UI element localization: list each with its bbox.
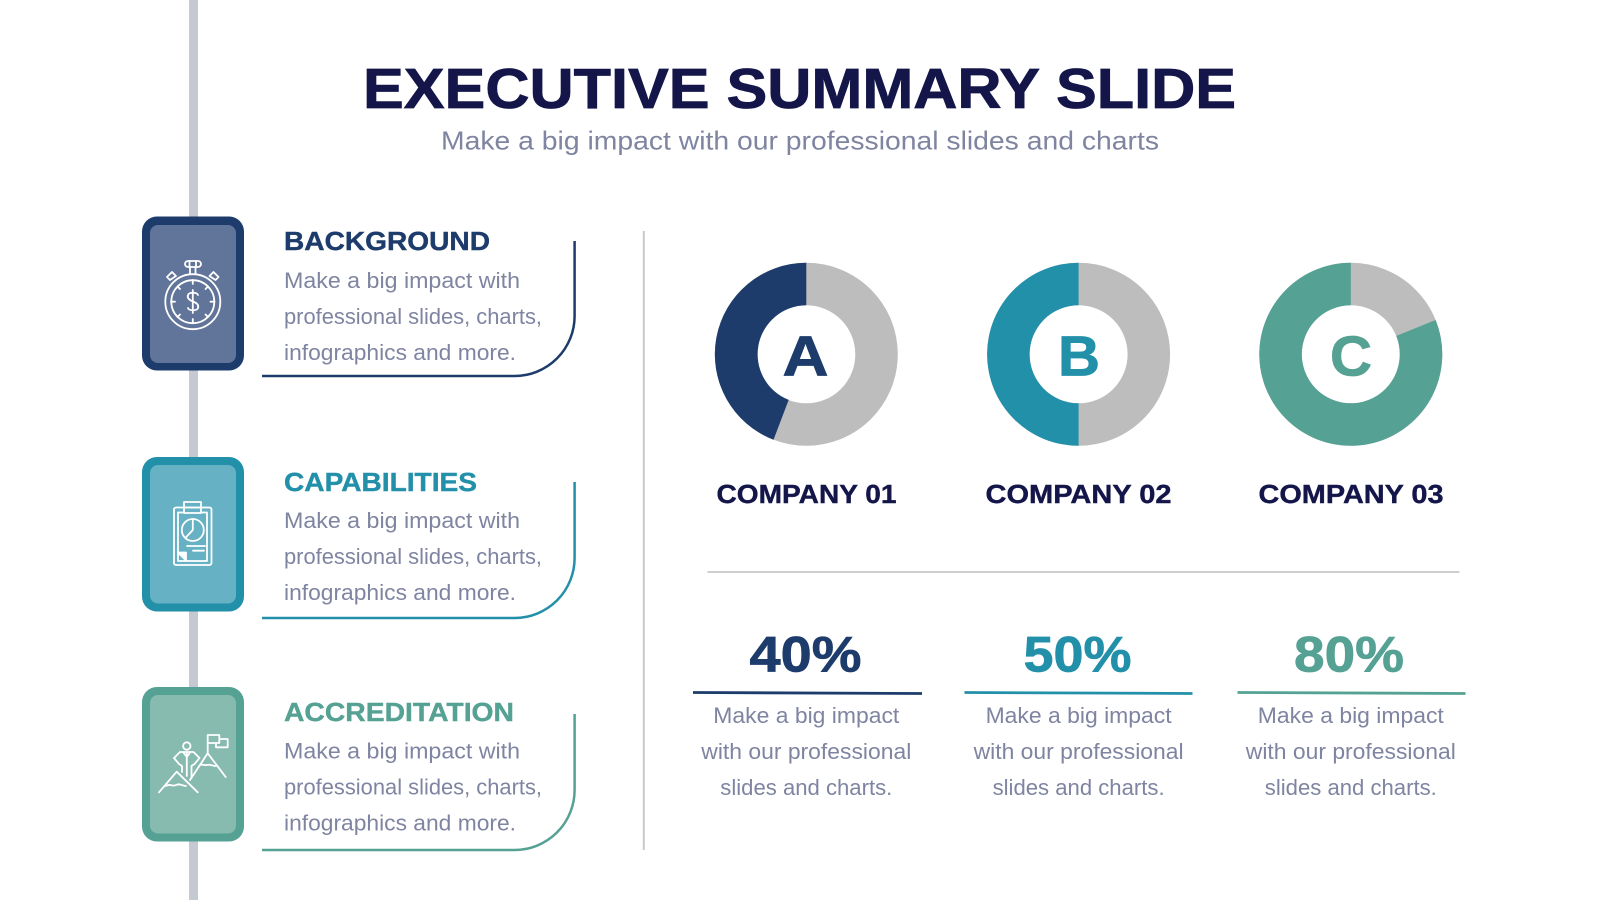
text: capabilities: professional slides, charts, — [284, 544, 542, 569]
text: capabilities — [284, 508, 542, 605]
icon card: accreditation — [142, 687, 244, 842]
panel: accreditation — [142, 687, 575, 850]
panel: background — [142, 216, 575, 376]
icon: stopwatch — [165, 261, 220, 329]
subtitle: Make a big impact with our professional slides and charts — [441, 126, 1159, 156]
text: capabilities: infographics and more. — [284, 580, 516, 605]
icon: clipboard — [174, 502, 212, 565]
stat: 80%: slides and charts. — [1265, 775, 1437, 800]
icon card: background — [142, 216, 244, 370]
label: company 02: COMPANY 02 — [986, 479, 1172, 509]
stat: 80% — [1238, 626, 1466, 800]
heading: capabilities: CAPABILITIES — [284, 467, 477, 497]
text: accreditation — [284, 738, 542, 836]
donut chart: company A — [715, 263, 877, 440]
text: accreditation: infographics and more. — [284, 810, 516, 836]
text: background: infographics and more. — [284, 340, 516, 365]
icon: mountain climber — [159, 735, 228, 792]
stat: 40%: 40% — [750, 626, 862, 682]
text: accreditation: professional slides, charts, — [284, 774, 542, 800]
letter C: C — [1330, 324, 1372, 388]
timeline vertical bar — [189, 0, 198, 900]
stat: 40% — [693, 626, 922, 800]
label: company 03: COMPANY 03 — [1258, 479, 1444, 509]
donut chart: company B — [987, 263, 1149, 446]
stat: 40%: Make a big impact — [713, 703, 899, 728]
stat: 50%: with our professional — [973, 739, 1184, 764]
stat: 80%: Make a big impact — [1258, 703, 1444, 728]
donut chart: company C — [1259, 263, 1442, 446]
heading: background: BACKGROUND — [284, 226, 490, 256]
title: EXECUTIVE SUMMARY SLIDE — [363, 57, 1236, 121]
stat: 80%: with our professional — [1245, 739, 1456, 764]
stat: 50%: slides and charts. — [993, 775, 1165, 800]
stat: 80%: 80% — [1294, 626, 1404, 682]
text: background: Make a big impact with — [284, 268, 520, 293]
icon card: capabilities — [142, 457, 244, 612]
text: capabilities: Make a big impact with — [284, 508, 520, 533]
heading: accreditation: ACCREDITATION — [284, 697, 514, 727]
stat: 40%: with our professional — [700, 739, 911, 764]
text: background — [284, 268, 542, 365]
stat: 50%: Make a big impact — [986, 703, 1172, 728]
text: accreditation: Make a big impact with — [284, 738, 520, 764]
letter B: B — [1058, 324, 1100, 388]
bracket: capabilities — [262, 482, 575, 618]
stat: 50%: 50% — [1024, 626, 1132, 682]
stat: 50% — [964, 626, 1192, 800]
label: company 01: COMPANY 01 — [716, 479, 896, 509]
letter A: A — [782, 324, 828, 388]
bracket: background — [262, 241, 575, 376]
panel: capabilities — [142, 457, 575, 618]
text: background: professional slides, charts, — [284, 304, 542, 329]
bracket: accreditation — [262, 714, 575, 850]
stat: 40%: slides and charts. — [720, 775, 892, 800]
